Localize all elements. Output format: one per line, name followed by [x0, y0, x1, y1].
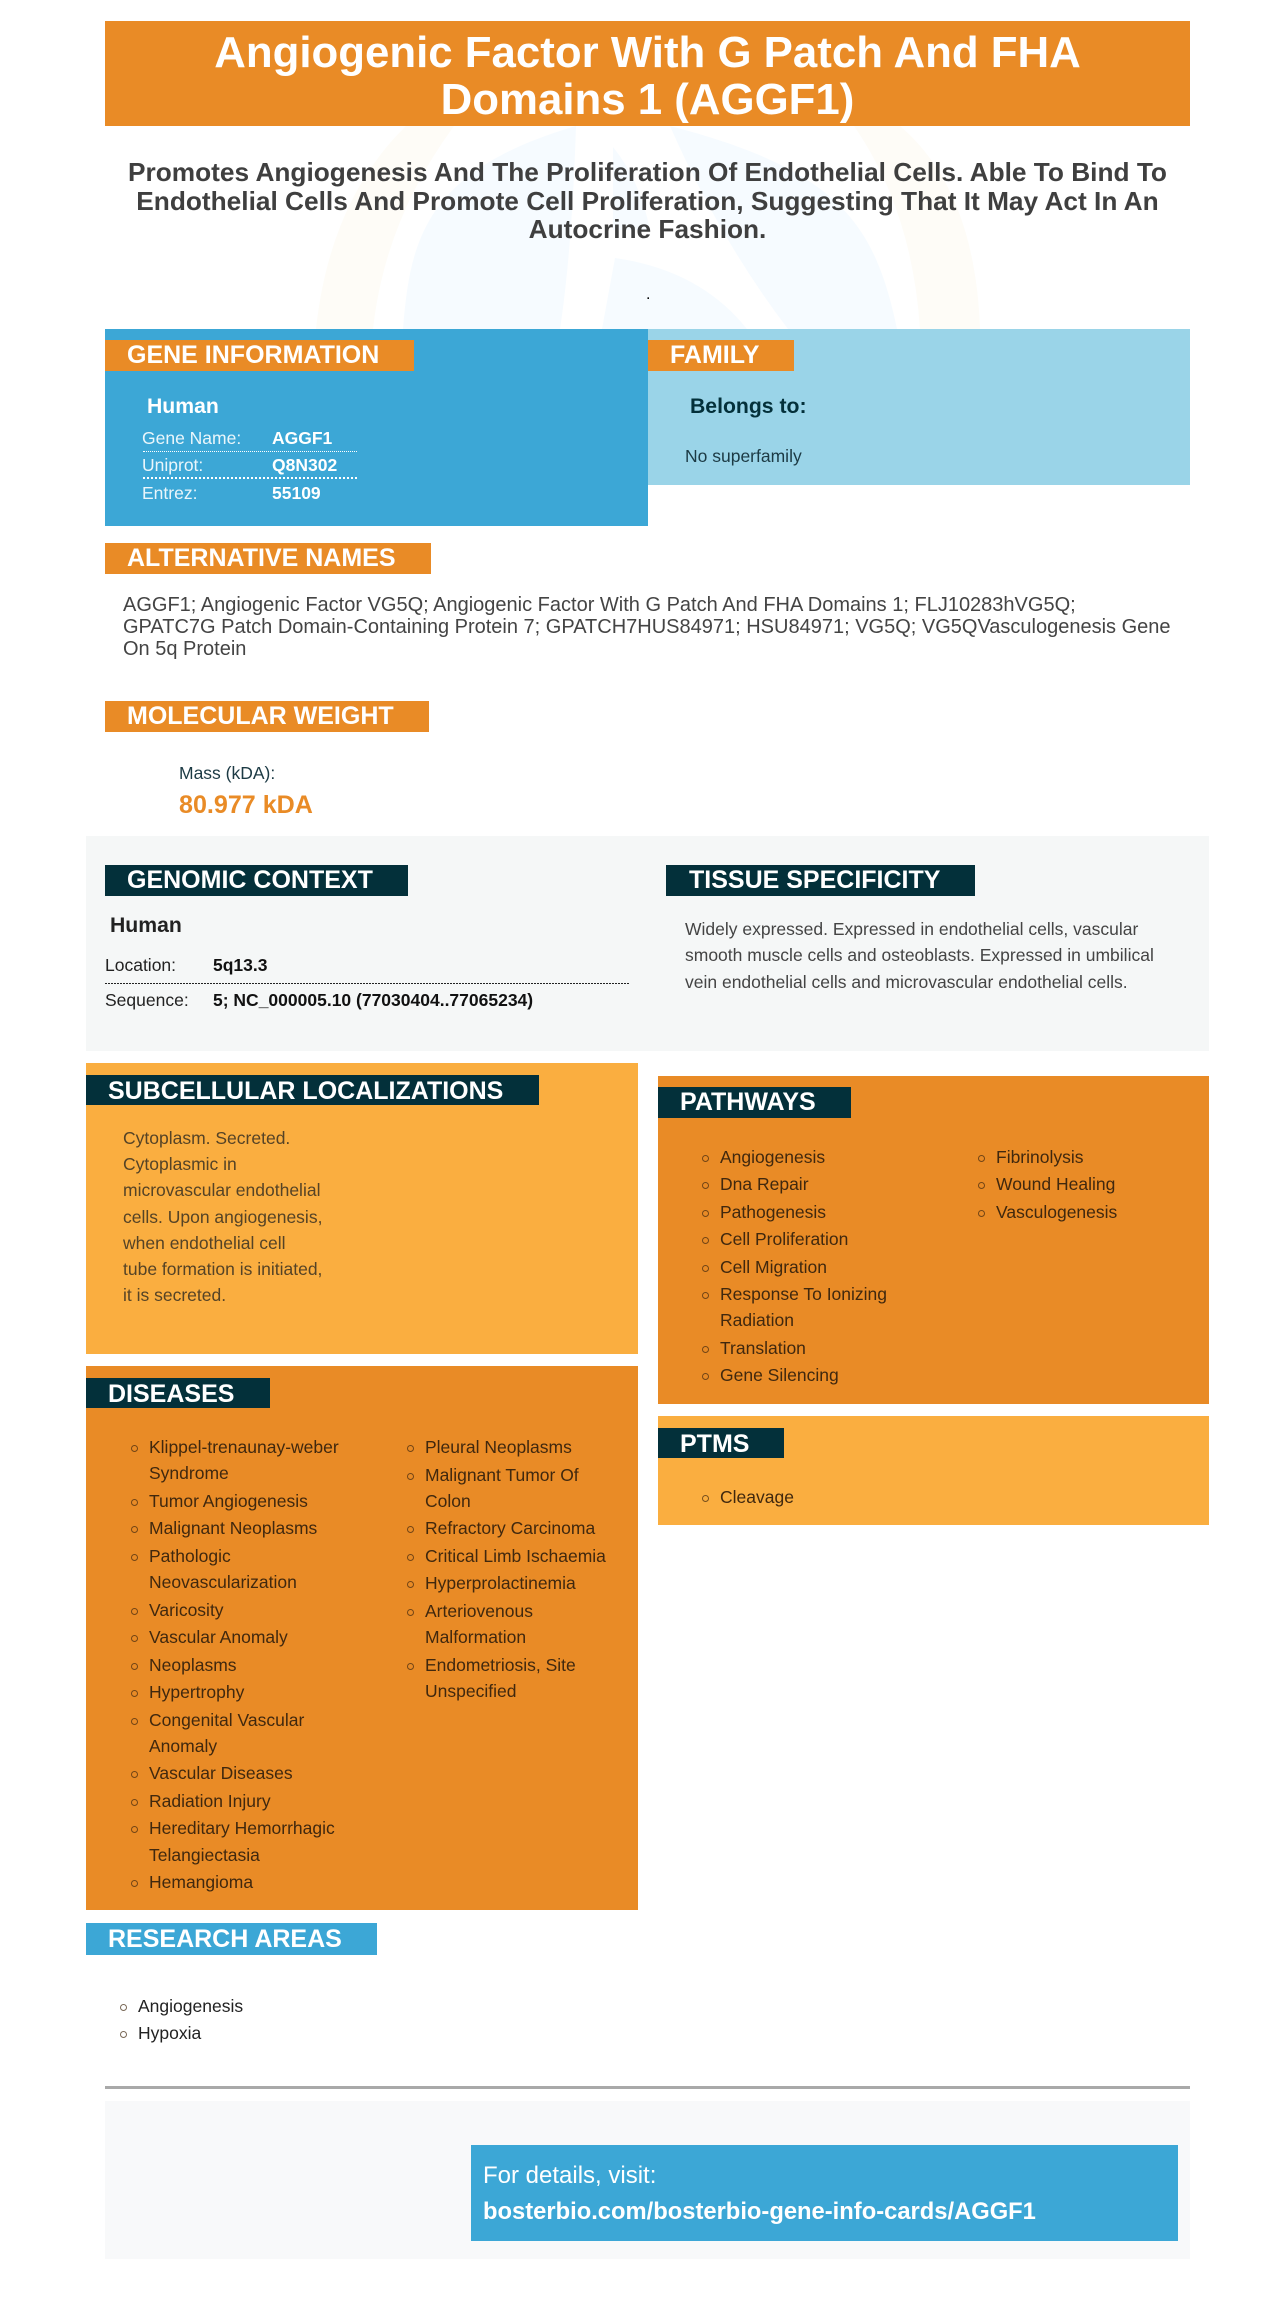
tissue specificity text: vein endothelial cells and microvascular endothelial cells.	[685, 972, 1128, 992]
research areas list: Hypoxia	[138, 2023, 201, 2043]
localization text: Cytoplasm. Secreted.	[123, 1128, 290, 1148]
subtitle description: Promotes Angiogenesis And The Proliferation Of Endothelial Cells. Able To Bind To	[128, 157, 1167, 187]
panel: diseases	[86, 1366, 638, 1910]
heading: pathways: PATHWAYS	[680, 1088, 816, 1116]
organism: human: Human	[147, 395, 219, 418]
alternative names text: On 5q Protein	[123, 638, 246, 660]
diseases list column 1: Vascular Anomaly	[149, 1627, 288, 1647]
sequence value: 5; NC_000005.10 (77030404..77065234)	[213, 990, 533, 1010]
diseases list column 2: Pleural Neoplasms	[425, 1437, 572, 1457]
heading: diseases: DISEASES	[108, 1380, 234, 1408]
heading: molecular weight: MOLECULAR WEIGHT	[127, 702, 394, 730]
title: Angiogenic Factor With G Patch And FHA	[214, 28, 1081, 77]
diseases list column 1: Congenital Vascular	[149, 1710, 304, 1730]
research areas list	[120, 1996, 243, 2043]
entrez label: Entrez:	[142, 483, 197, 503]
diseases list column 1: Hereditary Hemorrhagic	[149, 1818, 335, 1838]
heading: family: FAMILY	[670, 341, 759, 369]
heading: gene information: GENE INFORMATION	[127, 341, 379, 369]
diseases list column 2: Critical Limb Ischaemia	[425, 1546, 606, 1566]
tissue specificity text: smooth muscle cells and osteoblasts. Expressed in umbilical	[685, 945, 1154, 965]
diseases list column 1: Vascular Diseases	[149, 1763, 293, 1783]
panel: subcellular localizations	[86, 1063, 638, 1354]
pathways list column 1: Angiogenesis	[720, 1147, 825, 1167]
diseases list column 1: Telangiectasia	[149, 1845, 260, 1865]
pathways list column 2: Wound Healing	[996, 1174, 1115, 1194]
gene name value: AGGF1	[272, 428, 332, 448]
heading: tissue specificity: TISSUE SPECIFICITY	[689, 866, 940, 894]
entrez value: 55109	[272, 483, 321, 503]
heading: family	[648, 340, 794, 371]
heading: alternative names: ALTERNATIVE NAMES	[127, 544, 396, 572]
title: Domains 1 (AGGF1)	[441, 75, 854, 124]
heading: research areas: RESEARCH AREAS	[108, 1925, 342, 1953]
diseases list column 2: Malignant Tumor Of	[425, 1465, 579, 1485]
small dot text: .	[646, 286, 650, 303]
heading: ptms: PTMS	[680, 1430, 749, 1458]
heading: genomic context: GENOMIC CONTEXT	[127, 866, 373, 894]
pathways list column 2: Vasculogenesis	[996, 1202, 1117, 1222]
heading: subcellular localizations: SUBCELLULAR LOCALIZATIONS	[108, 1077, 503, 1105]
diseases list column 1: Pathologic	[149, 1546, 231, 1566]
tissue specificity text	[685, 919, 1154, 992]
panel: pathways	[658, 1076, 1209, 1404]
localization text: it is secreted.	[123, 1285, 226, 1305]
subtitle description: Endothelial Cells And Promote Cell Proliferation, Suggesting That It May Act In An	[136, 186, 1159, 216]
pathways list column 1: Dna Repair	[720, 1174, 809, 1194]
diseases list column 1	[131, 1437, 339, 1892]
panel: ptms	[658, 1416, 1209, 1525]
heading: diseases	[86, 1378, 270, 1408]
callout: details link: For details, visit:	[483, 2162, 656, 2189]
panel: footer	[105, 2101, 1190, 2259]
pathways list column 1: Translation	[720, 1338, 806, 1358]
subtitle description	[128, 157, 1167, 244]
location value: 5q13.3	[213, 955, 267, 975]
diseases list column 2	[407, 1437, 606, 1701]
mass value: 80.977 kDA	[179, 791, 313, 819]
ptms list item: Cleavage	[720, 1487, 794, 1507]
mass label: Mass (kDA):	[179, 763, 275, 783]
pathways list column 1: Pathogenesis	[720, 1202, 826, 1222]
callout: details link: bosterbio.com/bosterbio-gene-info-cards/AGGF1	[483, 2198, 1036, 2225]
diseases list column 2: Malformation	[425, 1627, 526, 1647]
panel: family	[648, 329, 1190, 485]
diseases list column 1: Tumor Angiogenesis	[149, 1491, 308, 1511]
alternative names text: AGGF1; Angiogenic Factor VG5Q; Angiogenic Factor With G Patch And FHA Domains 1; FLJ10283hVG5Q;	[123, 594, 1076, 616]
location label: Location:	[105, 955, 176, 975]
heading: pathways	[658, 1087, 851, 1118]
heading: ptms	[658, 1428, 784, 1458]
localization text: Cytoplasmic in	[123, 1154, 237, 1174]
family value: No superfamily	[685, 446, 802, 466]
pathways list column 1: Radiation	[720, 1310, 794, 1330]
diseases list column 1: Hypertrophy	[149, 1682, 244, 1702]
organism: human: Human	[110, 914, 182, 937]
localization text: microvascular endothelial	[123, 1180, 320, 1200]
background watermark	[403, 126, 896, 329]
title	[105, 21, 1190, 126]
diseases list column 1: Radiation Injury	[149, 1791, 271, 1811]
diseases list column 1: Neoplasms	[149, 1655, 237, 1675]
diseases list column 2: Refractory Carcinoma	[425, 1518, 595, 1538]
pathways list column 1: Response To Ionizing	[720, 1284, 887, 1304]
uniprot value: Q8N302	[272, 455, 337, 475]
diseases list column 2: Unspecified	[425, 1681, 516, 1701]
belongs to: Belongs to:	[690, 395, 807, 418]
panel: gene information	[105, 329, 648, 526]
alternative names text	[123, 594, 1171, 660]
diseases list column 2: Arteriovenous	[425, 1601, 533, 1621]
localization text: when endothelial cell	[123, 1233, 285, 1253]
diseases list column 1: Hemangioma	[149, 1872, 253, 1892]
pathways list column 2: Fibrinolysis	[996, 1147, 1084, 1167]
sequence label: Sequence:	[105, 990, 189, 1010]
localization text: cells. Upon angiogenesis,	[123, 1207, 322, 1227]
callout: details link	[471, 2145, 1178, 2241]
localization text: tube formation is initiated,	[123, 1259, 322, 1279]
diseases list column 1: Malignant Neoplasms	[149, 1518, 317, 1538]
research areas list: Angiogenesis	[138, 1996, 243, 2016]
diseases list column 1: Syndrome	[149, 1463, 229, 1483]
tissue specificity text: Widely expressed. Expressed in endothelial cells, vascular	[685, 919, 1138, 939]
uniprot label: Uniprot:	[142, 455, 203, 475]
localization text	[123, 1128, 322, 1305]
alternative names text: GPATC7G Patch Domain-Containing Protein 7; GPATCH7HUS84971; HSU84971; VG5Q; VG5QVasculogenesis Gene	[123, 616, 1171, 638]
diseases list column 1: Varicosity	[149, 1600, 224, 1620]
diseases list column 2: Endometriosis, Site	[425, 1655, 576, 1675]
pathways list column 1: Cell Migration	[720, 1257, 827, 1277]
diseases list column 1: Anomaly	[149, 1736, 217, 1756]
diseases list column 2: Hyperprolactinemia	[425, 1573, 576, 1593]
subtitle description: Autocrine Fashion.	[529, 214, 766, 244]
pathways list column 1: Gene Silencing	[720, 1365, 839, 1385]
pathways list column 1	[702, 1147, 887, 1385]
pathways list column 2	[978, 1147, 1117, 1222]
gene name label: Gene Name:	[142, 428, 241, 448]
diseases list column 1: Neovascularization	[149, 1572, 297, 1592]
pathways list column 1: Cell Proliferation	[720, 1229, 848, 1249]
panel: genomic context and tissue specificity	[86, 836, 1209, 1051]
diseases list column 2: Colon	[425, 1491, 471, 1511]
diseases list column 1: Klippel-trenaunay-weber	[149, 1437, 339, 1457]
